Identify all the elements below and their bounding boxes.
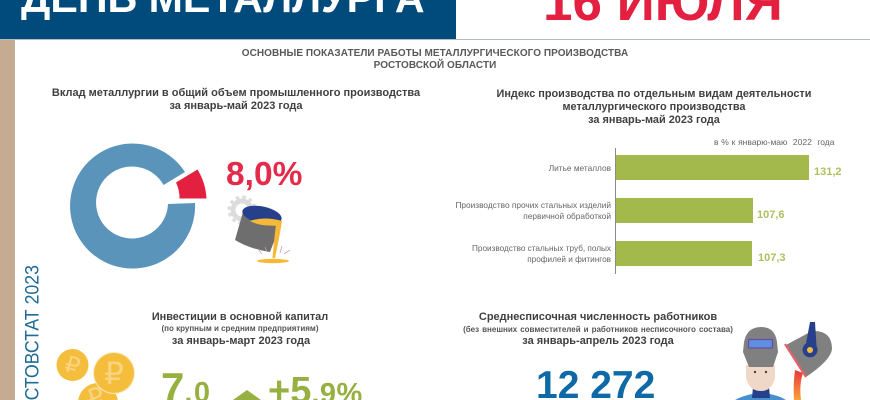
panel heading: production index: Индекс производства по отдельным видам деятельности: [497, 88, 811, 100]
eyes: [754, 371, 767, 373]
gear: [229, 197, 255, 223]
panel heading: contribution: за январь-май 2023 года: [169, 100, 302, 112]
bar: steel pipes: [616, 241, 752, 266]
employees note: (без внешних совместителей и работников несписочного состава): [463, 325, 733, 334]
bar label: steel pipes: профилей и фитингов: [527, 254, 611, 264]
main heading: [242, 48, 628, 70]
panel heading: production index: металлургического производства: [562, 101, 746, 113]
sparks: [258, 246, 290, 254]
bar label: other steel products: Производство прочих стальных изделий: [455, 200, 611, 210]
face: [746, 365, 775, 391]
main heading: РОСТОВСКОЙ ОБЛАСТИ: [374, 60, 496, 70]
welding helmet: [743, 327, 778, 367]
bar: metal casting: [616, 155, 809, 180]
investment note: (по крупным и средним предприятиям): [161, 324, 318, 333]
share value: 8,0%: [226, 156, 302, 193]
main heading: ОСНОВНЫЕ ПОКАЗАТЕЛИ РАБОТЫ МЕТАЛЛУРГИЧЕСКОГО ПРОИЗВОДСТВА: [242, 48, 628, 58]
donut: rest of industry: [70, 144, 195, 269]
coin left: ₽: [62, 352, 83, 380]
header line: [0, 39, 870, 40]
molten stream: [794, 370, 803, 400]
collar: [752, 387, 770, 398]
panel heading: contribution: [52, 87, 420, 112]
ladle pivot: [807, 347, 813, 353]
icon: ladle pouring metal: [228, 196, 290, 264]
coin right: ₽: [104, 356, 124, 392]
panel heading: production index: [497, 88, 811, 126]
side strip: [0, 40, 15, 400]
ladle handle: [803, 322, 818, 357]
bar value: 107,3: 107,3: [758, 252, 786, 264]
molten metal: [250, 218, 282, 226]
bar chart: [615, 148, 616, 274]
donut: metallurgy share: [176, 170, 206, 198]
shoulders: [735, 394, 786, 400]
ladle rim: [785, 344, 806, 377]
ladle: [786, 331, 832, 377]
bar label: metal casting: Литье металлов: [549, 163, 611, 173]
pouring stream: [272, 221, 282, 258]
bar label: steel pipes: [472, 244, 611, 264]
bar label: other steel products: первичной обработкой: [523, 210, 611, 220]
donut chart: [70, 144, 206, 268]
helmet visor: [748, 340, 772, 348]
ladle body: [235, 212, 282, 252]
bar: other steel products: [616, 198, 753, 223]
header band: title: [0, 0, 456, 39]
icon: steelworker and ladle: [735, 322, 832, 400]
bar value: 131,2: 131,2: [814, 166, 842, 178]
bar value: 107,6: 107,6: [757, 209, 785, 221]
investment period: за январь-март 2023 года: [172, 335, 310, 347]
bar label: other steel products: [455, 200, 611, 220]
employees period: за январь-апрель 2023 года: [522, 335, 674, 347]
panel heading: investment: Инвестиции в основной капитал: [152, 311, 328, 323]
ladle rim: [241, 203, 283, 227]
icon: up arrow: [233, 390, 261, 400]
icon: coins: [56, 349, 135, 400]
panel heading: contribution: Вклад металлургии в общий объем промышленного производства: [52, 87, 420, 99]
panel heading: employees: Среднесписочная численность работников: [479, 311, 717, 323]
bar label: steel pipes: Производство стальных труб, полых: [472, 244, 611, 253]
chart unit note: в % к январю-маю 2022 года: [714, 137, 834, 147]
panel heading: production index: за январь-май 2023 года: [588, 114, 720, 126]
puddle: [257, 259, 289, 263]
axis: [615, 148, 616, 274]
